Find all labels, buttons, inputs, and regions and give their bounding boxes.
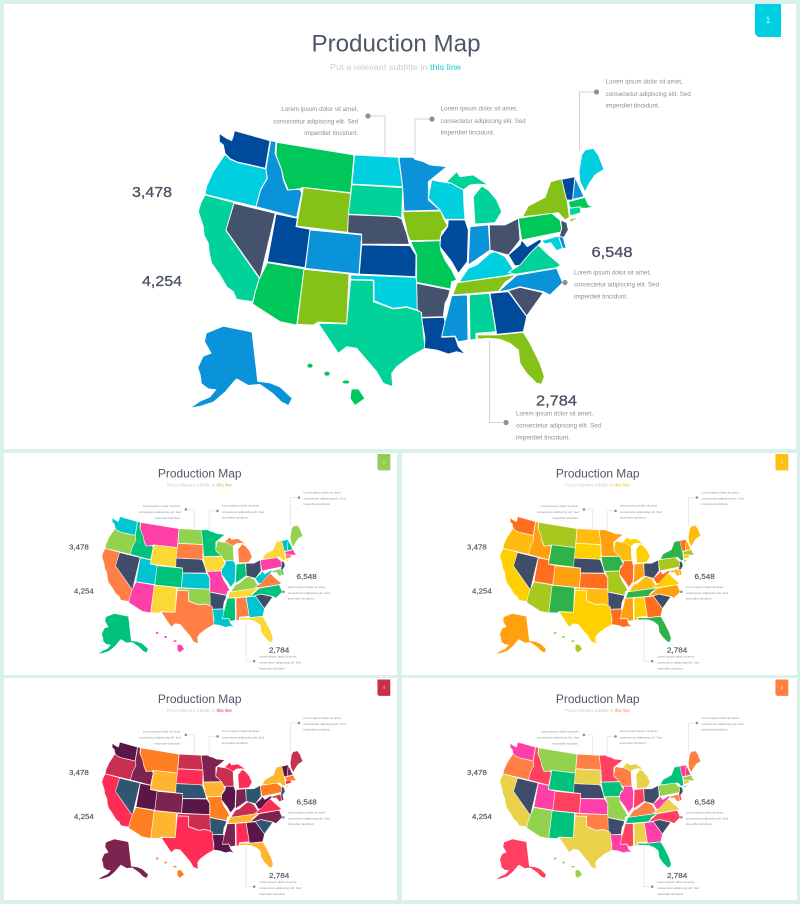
callouts: Lorem ipsum dolor sit amet, [304,490,342,494]
callouts: Lorem ipsum dolor sit amet, [620,504,658,508]
callouts: consectetur adipiscing elit. Sed [304,497,346,501]
state: Oregon [205,154,267,207]
callout: upper middle: Lorem ipsum dolor sit amet, [441,106,518,112]
callouts: consectetur adipiscing elit. Sed [139,510,181,514]
callouts: Lorem ipsum dolor sit amet, [657,655,695,659]
callouts: consectetur adipiscing elit. Sed [259,661,302,665]
callouts: consectetur adipiscing elit. Sed [537,510,579,514]
stat: 3,478: 3,478 [467,544,487,552]
callouts: consectetur adipiscing elit. Sed [657,661,700,665]
state: Nebraska [348,215,409,244]
state: Colorado [305,230,362,274]
map: United States [192,131,604,407]
state: Long Island [568,216,580,222]
state: New Hampshire [573,177,584,199]
stat: 4,254: 4,254 [142,274,182,290]
state: Indiana [468,225,490,265]
state: Wyoming [297,188,351,232]
callouts: imperdiet tincidunt. [304,502,330,506]
page tab [775,454,788,470]
callouts: imperdiet tincidunt. [222,516,249,520]
callouts: Lorem ipsum dolor sit amet, [541,729,579,733]
state: Illinois [440,220,468,273]
callouts: imperdiet tincidunt. [154,741,181,745]
state: Connecticut and Rhode Island [569,207,581,216]
state: Arkansas [417,283,450,317]
state: Kansas [359,245,416,277]
state: Montana [276,142,354,193]
callouts: Lorem ipsum dolor sit amet, [541,504,579,508]
callouts: consectetur adipiscing elit. Sed [686,816,728,820]
state: Texas [318,280,425,387]
callout: south: Lorem ipsum dolor sit amet, [516,412,593,418]
stat: 3,478: 3,478 [69,544,89,552]
callout: east coast: imperdiet tincidunt. [574,294,628,300]
callouts: consectetur adipiscing elit. Sed [139,736,181,740]
callouts: Lorem ipsum dolor sit amet, [686,585,724,589]
state: Michigan lower peninsula [473,186,502,224]
panel: slide 3 background [402,453,797,675]
callout: upper right [580,80,691,150]
page tab: 1 [765,15,771,25]
state: Louisiana [422,317,465,354]
callouts: consectetur adipiscing elit. Sed [537,736,579,740]
stat: 2,784: 2,784 [667,647,687,655]
state: Vermont [562,177,575,200]
stat: 6,548: 6,548 [694,799,715,807]
callouts: consectetur adipiscing elit. Sed [222,735,264,739]
title: Production Map [556,692,640,706]
callout: upper middle [415,106,526,155]
state: Georgia [490,292,527,334]
callouts: consectetur adipiscing elit. Sed [222,510,264,514]
callouts: imperdiet tincidunt. [154,516,181,520]
stat: 4,254: 4,254 [74,813,94,821]
callouts: consectetur adipiscing elit. Sed [702,722,744,726]
callout: upper left [273,107,385,155]
callouts: consectetur adipiscing elit. Sed [620,735,662,739]
callouts: imperdiet tincidunt. [552,741,579,745]
callouts: imperdiet tincidunt. [288,822,315,826]
page tab [377,454,390,470]
title: Production Map [556,466,640,480]
slide 2 content [69,454,390,671]
state: Florida [477,332,544,384]
callouts: consectetur adipiscing elit. Sed [288,816,330,820]
state: Nevada [226,203,275,278]
state: New Jersey [559,220,568,238]
callouts [139,716,346,896]
stat: 4,254: 4,254 [472,813,492,821]
state: Massachusetts [568,197,593,208]
subtitle: Put a relevant subtitle in this line [565,708,631,713]
callouts: Lorem ipsum dolor sit amet, [288,810,326,814]
subtitle: Put a relevant subtitle in this line [565,483,631,488]
state: Arizona [253,263,304,325]
callouts: Lorem ipsum dolor sit amet, [304,716,342,720]
state: Alaska [192,327,292,407]
callout: south: consectetur adipiscing elit. Sed [516,424,601,430]
stat: 2,784: 2,784 [536,394,577,410]
map [99,517,303,654]
state: West Virginia [508,239,542,266]
stat: 6,548: 6,548 [694,573,715,581]
stat: 2,784: 2,784 [667,872,687,880]
callouts: Lorem ipsum dolor sit amet, [620,729,658,733]
callouts: imperdiet tincidunt. [259,892,286,896]
callouts: imperdiet tincidunt. [686,822,713,826]
state: New Mexico [297,269,349,325]
state: Iowa [403,211,448,241]
state: Delaware [558,236,566,248]
state: Idaho [256,141,302,217]
callout: upper middle: consectetur adipiscing elit. Sed [441,119,526,125]
state: Wisconsin [428,180,465,219]
page tab [755,4,781,37]
callouts: consectetur adipiscing elit. Sed [620,510,662,514]
map [99,742,303,879]
state: Virginia [508,244,561,274]
stat: 3,478: 3,478 [69,769,89,777]
title: Production Map [158,466,242,480]
stat: 3,478: 3,478 [132,185,172,201]
state: Oklahoma [351,275,417,310]
callouts: imperdiet tincidunt. [620,516,647,520]
callout: upper left: Lorem ipsum dolor sit amet, [281,107,359,113]
callouts: imperdiet tincidunt. [657,892,684,896]
state: California [198,195,259,302]
stat: 6,548: 6,548 [296,799,317,807]
state: Pennsylvania [518,213,562,240]
callouts: imperdiet tincidunt. [620,741,647,745]
callouts: Lorem ipsum dolor sit amet, [288,585,326,589]
callout: upper right: Lorem ipsum dolor sit amet, [606,80,683,86]
callout: upper left: imperdiet tincidunt. [304,131,359,137]
page tab: 5 [781,685,784,690]
callouts: Lorem ipsum dolor sit amet, [259,655,297,659]
slide 3 content [467,454,788,671]
slide 5 content [467,679,788,896]
state: Maryland [542,236,563,251]
state: Tennessee [453,275,517,295]
callout: upper right: consectetur adipiscing elit. Sed [606,92,691,98]
state: New York [523,179,569,220]
callouts: Lorem ipsum dolor sit amet, [259,880,297,884]
callout: upper left: consectetur adipiscing elit. Sed [273,120,358,126]
callouts: Lorem ipsum dolor sit amet, [222,504,260,508]
state: Washington [219,131,270,168]
slide 4 content [69,679,390,896]
state: North Carolina [498,268,563,295]
callout: east coast [562,270,659,300]
stat: 2,784: 2,784 [269,647,289,655]
callouts: Lorem ipsum dolor sit amet, [143,729,181,733]
callouts: Lorem ipsum dolor sit amet, [702,716,740,720]
state: Maine [579,148,604,192]
callouts: Lorem ipsum dolor sit amet, [657,880,695,884]
state: Missouri [411,241,457,289]
callouts: imperdiet tincidunt. [686,597,713,601]
panel: slide 4 background [4,678,397,900]
stat: 2,784: 2,784 [269,872,289,880]
state: South Carolina [508,287,543,316]
stat: 6,548: 6,548 [592,245,632,261]
stat: 6,548: 6,548 [296,573,317,581]
callouts: imperdiet tincidunt. [288,597,315,601]
state: Mississippi [442,295,468,342]
callouts: Lorem ipsum dolor sit amet, [686,810,724,814]
subtitle: Put a relevant subtitle in this line [330,62,461,72]
map [497,742,701,879]
callouts [537,716,744,896]
callout: upper right: imperdiet tincidunt. [606,104,660,110]
state: Utah [267,214,310,268]
callouts: imperdiet tincidunt. [259,667,286,671]
callout: south: imperdiet tincidunt. [516,436,570,442]
callout: east coast: consectetur adipiscing elit. Sed [574,282,659,288]
callouts: Lorem ipsum dolor sit amet, [702,490,740,494]
callout: south [490,341,601,442]
state: Minnesota [399,157,447,211]
title: Production Map [312,30,480,58]
callouts: consectetur adipiscing elit. Sed [657,886,700,890]
callouts: Lorem ipsum dolor sit amet, [143,504,181,508]
state: North Dakota [352,155,403,187]
panel: main slide [4,4,796,449]
title: Production Map [158,692,242,706]
state: Alabama [469,293,496,340]
state: South Dakota [348,185,403,218]
state: Hawaii [307,364,364,405]
state: Kentucky [459,252,515,282]
state: Michigan upper peninsula [447,172,488,190]
callouts: consectetur adipiscing elit. Sed [702,497,744,501]
callouts: imperdiet tincidunt. [702,502,728,506]
callouts: imperdiet tincidunt. [657,667,684,671]
callouts: consectetur adipiscing elit. Sed [288,591,330,595]
callouts: imperdiet tincidunt. [222,741,249,745]
callouts: imperdiet tincidunt. [702,728,728,732]
callouts: consectetur adipiscing elit. Sed [686,591,728,595]
stat: 3,478: 3,478 [467,769,487,777]
page tab: 2 [383,459,386,464]
callouts: Lorem ipsum dolor sit amet, [222,729,260,733]
page tab [775,679,788,696]
page tab: 3 [781,459,784,464]
panel: slide 2 background [4,453,397,675]
subtitle: Put a relevant subtitle in this line [167,708,233,713]
subtitle: Put a relevant subtitle in this line [167,483,233,488]
callout: upper middle: imperdiet tincidunt. [441,130,495,136]
callouts [139,490,346,671]
page tab: 4 [383,685,386,690]
callouts: consectetur adipiscing elit. Sed [304,722,346,726]
page tab [377,679,390,696]
callout: east coast: Lorem ipsum dolor sit amet, [574,270,651,276]
stat: 4,254: 4,254 [74,588,94,596]
callouts: imperdiet tincidunt. [552,516,579,520]
map [497,517,701,654]
callouts: consectetur adipiscing elit. Sed [259,886,302,890]
stat: 4,254: 4,254 [472,588,492,596]
callouts [537,490,744,671]
callouts: imperdiet tincidunt. [304,728,330,732]
panel: slide 5 background [402,678,797,900]
state: Ohio [489,218,520,255]
